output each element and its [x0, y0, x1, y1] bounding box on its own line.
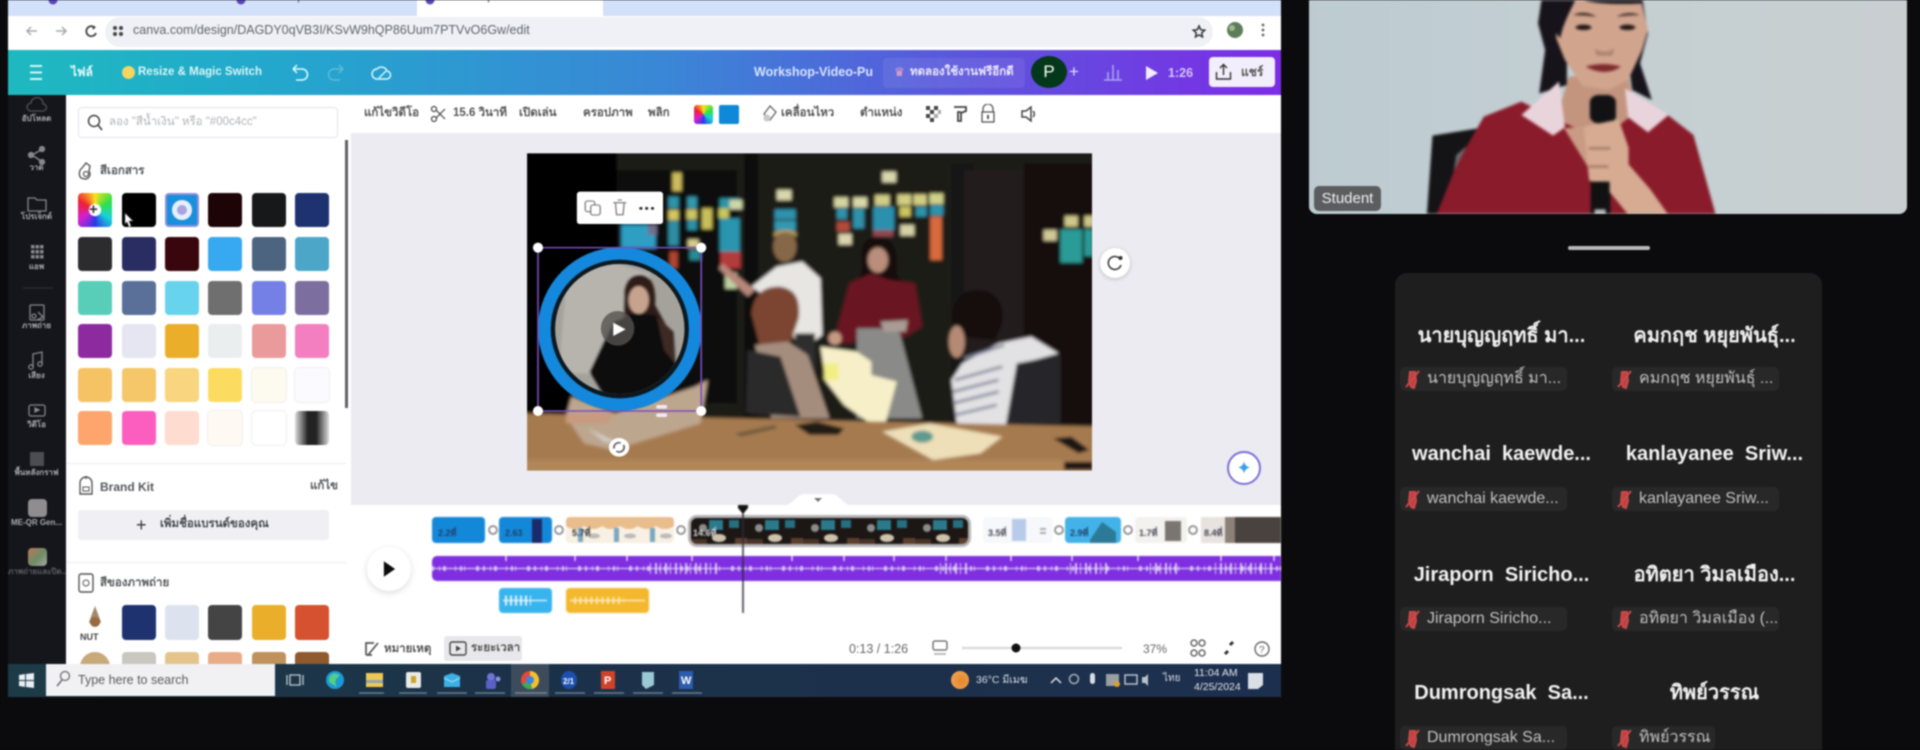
participant tile: wanchai	[1400, 443, 1591, 510]
search box: Type here to search	[78, 673, 188, 687]
sidebar label uploads: อัปโหลด	[22, 114, 51, 123]
magic assistant button	[1227, 451, 1261, 485]
clock date: 4/25/2024	[1194, 681, 1241, 693]
photo palette one with logo: NUT	[80, 632, 98, 642]
meeting photograph	[519, 143, 1104, 483]
floating element toolbar	[577, 192, 663, 224]
timeline play button	[367, 547, 411, 591]
editor toolbar	[351, 95, 1281, 133]
edit video label: แก้ไขวิดีโอ	[364, 107, 419, 119]
swatch icon inside selected	[172, 200, 192, 220]
windows taskbar	[8, 664, 1281, 697]
weather icon	[951, 671, 969, 689]
brand kit heading	[78, 475, 338, 496]
playback time: 0:13 / 1:26	[849, 642, 908, 656]
selected clip: 14.6ที่	[693, 526, 717, 538]
participant tile: คมกฤช: คมกฤช หยุยพันธุ์ ...	[1639, 370, 1773, 387]
clip five	[986, 518, 1048, 542]
brand kit add button: +	[136, 515, 147, 535]
document title: Workshop-Video-Pu	[754, 65, 873, 79]
taskbar app icons: W	[681, 675, 692, 687]
resize and magic switch: Resize & Magic Switch	[138, 66, 262, 78]
transition marker six	[1124, 526, 1132, 534]
rainbow colour button	[694, 105, 713, 124]
zoom controls	[931, 638, 1271, 658]
clip eight: 8.4ที่	[1204, 526, 1223, 538]
photo colours heading	[77, 572, 170, 594]
yellow audio clip	[566, 588, 649, 613]
presenter man	[719, 230, 822, 370]
url pill	[105, 17, 1213, 47]
url text: canva.com/design/DAGDY0qVB3I/KSvW9hQP86Uum7PTVvO6Gw/edit	[133, 23, 530, 37]
participants panel	[1395, 273, 1822, 750]
presenter webcam panel	[1309, 0, 1907, 214]
navigation icons	[26, 24, 98, 38]
clip one: 2.2ที่	[438, 526, 457, 538]
participant tile: Jiraporn: Jiraporn Siricho...	[1414, 564, 1589, 586]
profile avatar: P	[1043, 62, 1055, 81]
notes footer button	[364, 641, 432, 657]
present button	[1145, 66, 1194, 80]
present button: 1:26	[1168, 66, 1193, 80]
canva header bar	[8, 50, 1281, 95]
clip five: 3.5ที่	[988, 526, 1007, 538]
start button	[18, 672, 35, 689]
site settings icon	[112, 25, 124, 37]
scattered paper	[820, 347, 897, 422]
clip seven	[1135, 517, 1187, 543]
hamburger menu icon	[29, 64, 43, 81]
magic assistant button: ✦	[1236, 458, 1252, 478]
laptop	[566, 380, 708, 450]
participant tile: ทิพย์วรรณ	[1612, 680, 1760, 750]
duration footer button	[444, 636, 522, 661]
transparency, style, lock and sound icons	[925, 103, 1036, 124]
sidebar label background: พื้นหลังกราฟ	[14, 468, 59, 477]
share button	[1209, 57, 1275, 87]
taskbar app icons: 2/1	[563, 677, 575, 686]
transition marker one	[489, 526, 497, 534]
participant tile: คมกฤช	[1612, 323, 1796, 390]
play overlay on circle	[601, 311, 634, 346]
seated man in stripes	[949, 290, 1060, 427]
sidebar label video: วิดีโอ	[27, 420, 46, 429]
sidebar label audio: เสียง	[28, 371, 45, 380]
transition marker seven	[1189, 526, 1197, 534]
photo palette two with logo	[80, 651, 330, 665]
brand kit heading: แก้ไข	[310, 480, 338, 492]
add collaborator plus: +	[1069, 62, 1079, 81]
heading: document colours: สีเอกสาร	[100, 165, 144, 177]
zoom percentage: 37%	[1143, 642, 1167, 656]
active tab	[417, 0, 603, 16]
sidebar label ME-QR: ME-QR Gen...	[11, 518, 62, 527]
video frame with meeting scene	[526, 152, 1093, 472]
sidebar label photo app: ภาพถ่ายและปิด...	[8, 567, 68, 576]
participant tile: kanlayanee: kanlayanee Sriw...	[1639, 490, 1769, 507]
voice-over audio track	[432, 556, 1292, 581]
participant tile: ทิพย์วรรณ: ทิพย์วรรณ	[1639, 729, 1710, 746]
timeline collapse tab	[788, 494, 847, 505]
participant tile: Jiraporn: Jiraporn Siricho...	[1427, 610, 1552, 627]
file menu: ไฟล์	[71, 65, 93, 79]
animate label: เคลื่อนไหว	[781, 107, 834, 119]
timeline tracks	[430, 504, 1282, 614]
participant tile: อทิตยา: อทิตยา วิมลเมือง...	[1634, 564, 1795, 586]
input language: ไทย	[1163, 673, 1180, 684]
selection box and handles	[533, 243, 706, 417]
share button: แชร์	[1241, 65, 1263, 79]
flip label: พลิก	[648, 107, 670, 119]
transition marker two	[555, 526, 563, 534]
sidebar app tile: photos	[28, 548, 47, 566]
transition marker three	[677, 526, 685, 534]
free trial pill	[883, 58, 1025, 88]
tab favicons	[48, 0, 436, 6]
seated red-haired woman	[746, 287, 830, 418]
participant tile: Dumrongsak	[1400, 682, 1589, 750]
clip six	[1065, 517, 1121, 543]
participant tile: นายบุญญฤทธิ์	[1400, 320, 1585, 390]
selected clip	[688, 515, 971, 547]
name tag: Student: Student	[1322, 190, 1373, 207]
heading: document colours	[78, 161, 146, 181]
analytics icon	[1103, 64, 1123, 82]
sidebar label draw: วาด	[29, 163, 44, 172]
brand kit add button: เพิ่มชื่อแบรนด์ของคุณ	[160, 518, 269, 530]
sidebar app tile: ME-QR	[28, 499, 47, 517]
sidebar label apps: แอพ	[29, 262, 44, 271]
duration label: 15.6 วินาที	[453, 107, 507, 119]
search field	[78, 107, 338, 138]
standing woman in red	[828, 237, 922, 418]
left icon sidebar	[8, 95, 66, 664]
play label: เปิดเล่น	[519, 107, 557, 119]
participant tile: นายบุญญฤทธิ์: นายบุญญฤทธิ์ มา...	[1418, 325, 1585, 347]
clip three	[566, 517, 674, 543]
browser address bar	[8, 16, 1281, 50]
undo, redo and cloud icons	[292, 64, 392, 82]
panel scrollbar	[345, 140, 348, 408]
presenter portrait	[1309, 0, 1907, 215]
clip one	[432, 517, 485, 543]
weather text: 36°C มีเมฆ	[976, 674, 1028, 686]
search box	[46, 664, 275, 696]
participant tile: นายบุญญฤทธิ์: นายบุญญฤทธิ์ มา...	[1427, 370, 1561, 387]
participant tile: ทิพย์วรรณ: ทิพย์วรรณ	[1670, 682, 1759, 704]
participant tile: kanlayanee	[1612, 443, 1803, 510]
zoom controls: ?	[1259, 645, 1265, 656]
cursor	[124, 212, 134, 228]
transition marker five	[1055, 526, 1063, 534]
free trial pill: ♛	[894, 65, 905, 79]
timeline panel	[351, 505, 1281, 664]
clip six: 2.9ที่	[1070, 526, 1089, 538]
clip two	[499, 517, 552, 543]
gallery drag handle	[1568, 246, 1650, 250]
participant tile: Dumrongsak: Dumrongsak Sa...	[1427, 729, 1555, 746]
participant tile: อทิตยา	[1612, 562, 1796, 630]
rotate handle	[609, 438, 629, 457]
sidebar label photos: ภาพถ่าย	[22, 321, 51, 330]
name tag: Student	[1314, 186, 1381, 211]
clip three: 5.7ที่	[572, 526, 591, 538]
sticky notes on wall	[621, 172, 1093, 289]
participant tile: อทิตยา: อทิตยา วิมลเมือง (...	[1639, 610, 1778, 627]
brand kit heading: Brand Kit	[100, 480, 154, 494]
free trial pill: ทดลองใช้งานฟรีอีกดี	[910, 66, 1014, 78]
search field: ลอง "สีน้ำเงิน" หรือ "#00c4cc"	[109, 116, 257, 128]
participant tile: Dumrongsak: Dumrongsak Sa...	[1414, 682, 1589, 704]
blue colour button	[719, 105, 739, 124]
participant tile: คมกฤช: คมกฤช หยุยพันธุ์...	[1633, 325, 1796, 347]
participant tile: wanchai: wanchai kaewde...	[1427, 490, 1559, 507]
photo colours heading: สีของภาพถ่าย	[100, 577, 169, 589]
colour side panel	[66, 95, 351, 664]
photo palette one with logo	[80, 604, 330, 642]
playhead	[738, 503, 748, 613]
clip two: 2.63	[505, 528, 523, 538]
browser window: Chrome with Canva editor	[8, 0, 1281, 697]
wooden table	[526, 410, 1093, 462]
selected circular video	[538, 247, 702, 411]
participant tile: kanlayanee: kanlayanee Sriw...	[1626, 443, 1803, 465]
plus on add colour swatch: +	[89, 201, 98, 218]
clip eight	[1201, 517, 1286, 543]
crop label: ครอปภาพ	[583, 107, 633, 119]
sidebar icons	[24, 96, 52, 466]
blue audio clip	[499, 588, 552, 613]
browser tab strip	[8, 0, 1281, 16]
position label: ตำแหน่ง	[860, 107, 902, 119]
notes footer button: หมายเหตุ	[384, 643, 431, 655]
refresh comment button beside frame	[1100, 248, 1130, 278]
clip seven: 1.7ที่	[1139, 526, 1158, 538]
clock time: 11:04 AM	[1194, 667, 1238, 679]
taskbar app icons	[285, 664, 1264, 698]
participant tile: Jiraporn	[1400, 564, 1589, 630]
colour swatch grid	[77, 192, 330, 446]
profile avatar	[1031, 56, 1067, 88]
animate icon	[762, 104, 778, 122]
bookmark star, profile, menu	[1191, 21, 1266, 39]
canvas background	[351, 133, 1281, 505]
duration footer button: ระยะเวลา	[471, 642, 520, 654]
taskbar app icons: P	[604, 675, 611, 687]
participant tile: wanchai: wanchai kaewde...	[1412, 443, 1591, 465]
sidebar label projects: โปรเจ็กต์	[21, 212, 52, 221]
brand kit add button	[78, 510, 329, 540]
scissors icon	[430, 105, 446, 123]
